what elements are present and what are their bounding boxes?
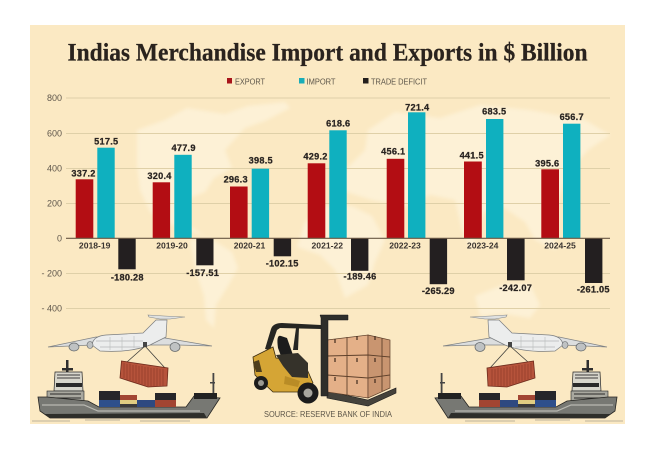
bars: 2023-24: 683.5: [482, 106, 506, 116]
bars: 2018-19: 2018-19: [79, 240, 111, 250]
bars: 2020-21: 2020-21: [234, 240, 265, 250]
y axis and grid: 0: [57, 234, 62, 244]
bars: 2021-22: 618.6: [326, 119, 350, 129]
bars: 2018-19: [71, 136, 144, 283]
bars: 2021-22: [303, 119, 376, 281]
bars: 2019-20: [147, 143, 219, 278]
bars: 2018-19: 337.2: [71, 169, 96, 179]
icon: container ship right: [435, 342, 623, 421]
bars: 2019-20: 477.9: [171, 143, 196, 153]
bars: 2020-21: 296.3: [224, 175, 248, 185]
bars: 2023-24: 2023-24: [467, 240, 499, 250]
world map: [137, 102, 610, 328]
zero axis: [66, 237, 610, 239]
bars: 2022-23: 456.1: [381, 147, 405, 157]
bars: 2020-21: 398.5: [249, 156, 273, 166]
y axis and grid: - 400: [41, 304, 62, 314]
y axis and grid: [41, 93, 610, 314]
bars: 2022-23: 2022-23: [389, 240, 421, 250]
bars: 2021-22: -189.46: [344, 271, 376, 281]
bars: 2020-21: -102.15: [266, 258, 299, 268]
legend: export: EXPORT: [235, 78, 265, 86]
icon: container ship left: [32, 342, 220, 421]
legend: [227, 78, 427, 86]
y axis and grid: 600: [47, 128, 62, 138]
bars: 2021-22: 429.2: [303, 151, 328, 161]
bars: 2022-23: -265.29: [422, 286, 455, 296]
bars: 2018-19: -180.28: [111, 273, 144, 283]
icon: cargo plane right: [443, 315, 607, 352]
y axis and grid: 400: [47, 164, 62, 174]
source note: SOURCE: RESERVE BANK OF INDIA: [264, 410, 393, 419]
bars: 2019-20: 2019-20: [156, 240, 188, 250]
bars: 2023-24: -242.07: [499, 283, 532, 293]
bars: 2019-20: 320.4: [147, 171, 172, 181]
y axis and grid: 800: [47, 93, 62, 103]
bar chart: [41, 93, 610, 314]
y axis and grid: 200: [47, 198, 62, 208]
bars: 2018-19: 517.5: [94, 136, 118, 146]
bars: 2024-25: [535, 112, 610, 294]
bars: 2023-24: [460, 106, 532, 293]
icon: cargo plane left: [48, 315, 212, 352]
bars: 2024-25: 656.7: [560, 112, 584, 122]
bars: 2024-25: -261.05: [577, 284, 610, 294]
title: Indias Merchandise Import and Exports in $ Billion: [68, 38, 588, 66]
bars: 2023-24: 441.5: [460, 150, 484, 160]
bars: 2022-23: [381, 102, 455, 296]
bars: 2020-21: [224, 156, 299, 268]
legend: trade deficit: TRADE DEFICIT: [371, 78, 427, 86]
bars: 2024-25: 395.6: [535, 159, 559, 169]
bars: 2024-25: 2024-25: [544, 240, 576, 250]
y axis and grid: - 200: [41, 268, 62, 278]
bars: 2019-20: -157.51: [186, 268, 219, 278]
icon: forklift with boxes: [253, 315, 396, 406]
bars: 2022-23: 721.4: [405, 102, 430, 112]
legend: import: IMPORT: [306, 78, 336, 86]
bars: 2021-22: 2021-22: [312, 240, 343, 250]
